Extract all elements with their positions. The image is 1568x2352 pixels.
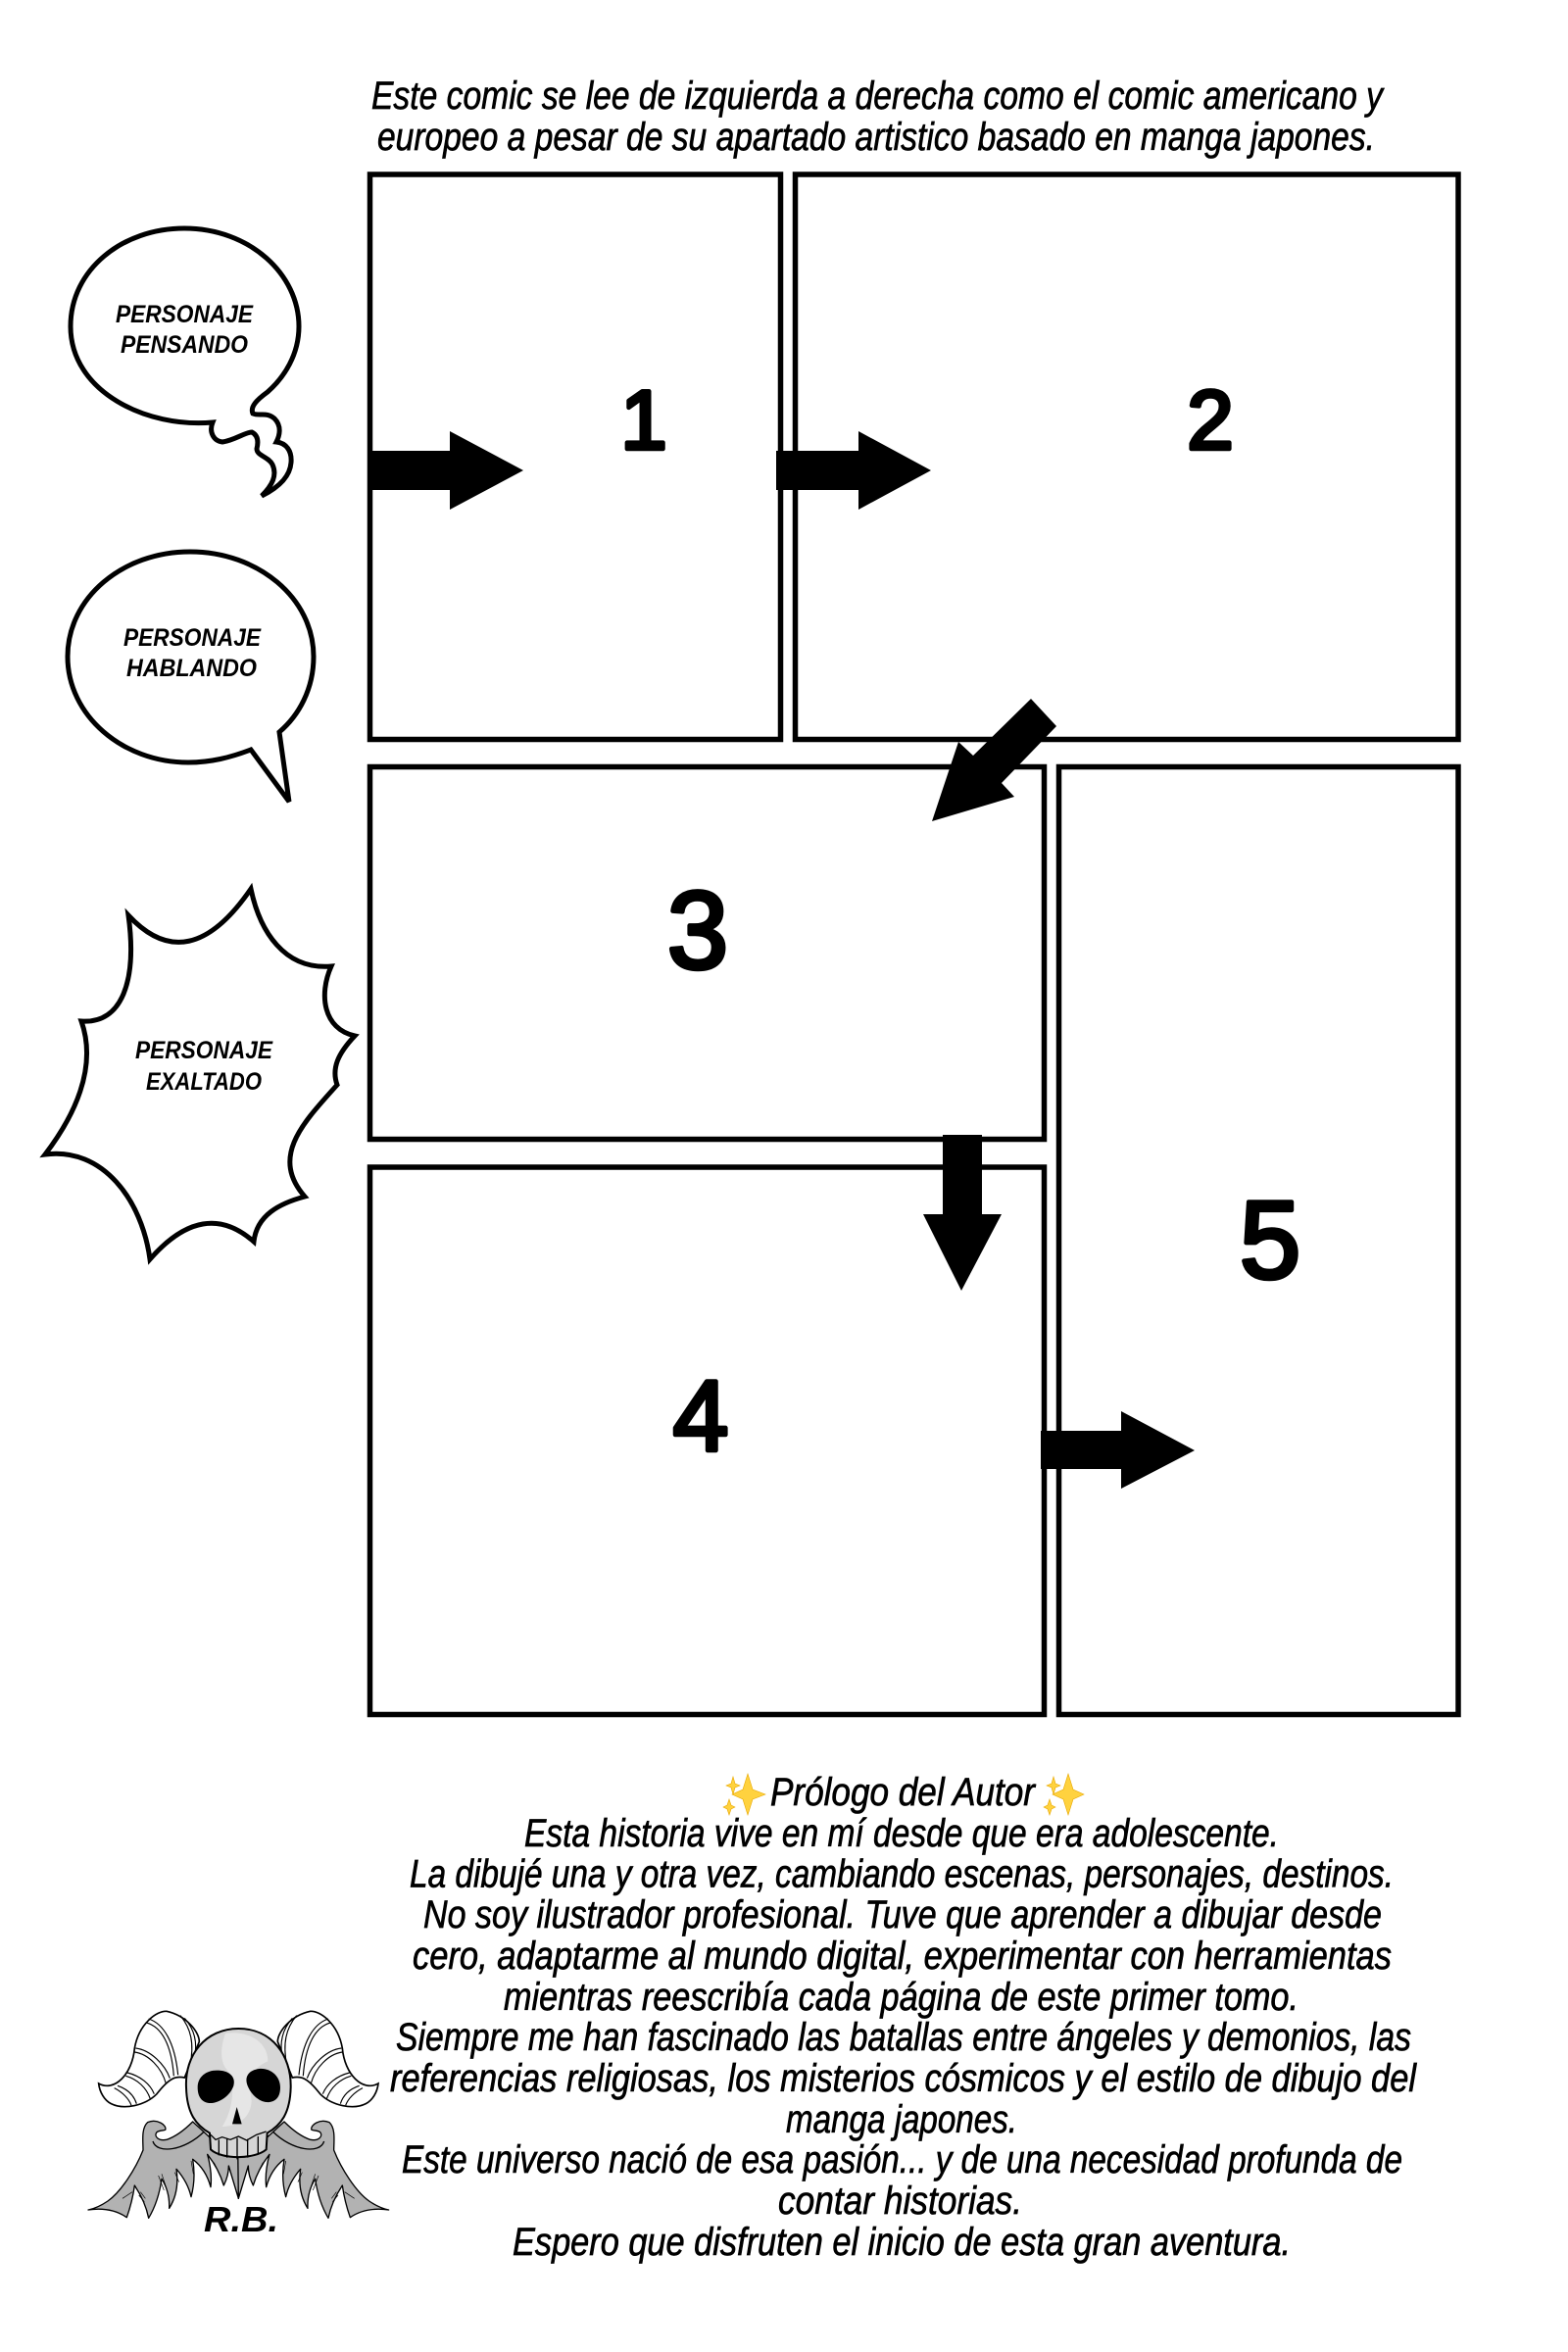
icon: right wing	[238, 2121, 389, 2218]
panel 1	[370, 174, 780, 739]
prologue body text: cero, adaptarme al mundo digital, experimentar con herramientas	[413, 1935, 1392, 1978]
speech bubble: talking	[68, 552, 314, 802]
prologue body text	[390, 1812, 1417, 2264]
prologue body text: manga japones.	[786, 2098, 1017, 2141]
panel 2	[796, 174, 1458, 739]
icon: skull	[186, 2029, 291, 2159]
arrow: panel 2 to panel 3	[932, 699, 1056, 821]
author prologue	[390, 1771, 1417, 2264]
speech bubble: exalted burst	[45, 889, 355, 1259]
speech bubble: thinking	[71, 228, 299, 496]
reading instructions text: Este comic se lee de izquierda a derecha como el comic americano y	[371, 74, 1386, 118]
arrow: into panel 1	[368, 431, 523, 510]
author logo: horned winged skull	[88, 2011, 389, 2239]
speech bubble: exalted burst: EXALTADO	[146, 1068, 262, 1096]
icon: right horn	[277, 2011, 378, 2107]
panel 5	[1058, 766, 1458, 1715]
panel 1: 1	[620, 374, 667, 467]
author logo: horned winged skull: R.B.	[204, 2199, 278, 2239]
icon: left wing	[88, 2121, 239, 2218]
prologue body text: Siempre me han fascinado las batallas entre ángeles y demonios, las	[396, 2016, 1411, 2059]
speech bubble: talking: PERSONAJE	[123, 624, 262, 652]
panel 4	[370, 1167, 1045, 1715]
prologue body text: La dibujé una y otra vez, cambiando escenas, personajes, destinos.	[410, 1852, 1394, 1895]
speech bubble: exalted burst: PERSONAJE	[135, 1037, 273, 1064]
reading instructions text	[371, 74, 1386, 159]
prologue body text: Espero que disfruten el inicio de esta gran aventura.	[513, 2221, 1291, 2264]
prologue heading: Prólogo del Autor	[770, 1771, 1036, 1814]
arrow: panel 1 to panel 2	[776, 431, 931, 510]
prologue body text: referencias religiosas, los misterios cósmicos y el estilo de dibujo del	[390, 2057, 1417, 2100]
panel 3: 3	[667, 869, 728, 992]
prologue body text: contar historias.	[778, 2180, 1022, 2223]
speech bubble: thinking: PENSANDO	[121, 331, 249, 359]
speech bubble: talking: HABLANDO	[126, 655, 258, 682]
panel 4: 4	[673, 1360, 728, 1472]
arrow: panel 4 to panel 5	[1041, 1411, 1195, 1489]
prologue body text: Esta historia vive en mí desde que era adolescente.	[524, 1812, 1279, 1855]
speech bubble: thinking: PERSONAJE	[116, 301, 254, 328]
panel 2: 2	[1187, 374, 1234, 467]
prologue body text: No soy ilustrador profesional. Tuve que aprender a dibujar desde	[423, 1893, 1382, 1936]
panel 3	[370, 766, 1045, 1139]
panel 5: 5	[1240, 1179, 1300, 1301]
reading instructions text: europeo a pesar de su apartado artistico basado en manga japones.	[377, 116, 1375, 159]
icon: left horn	[99, 2011, 199, 2107]
prologue body text: Este universo nació de esa pasión... y de una necesidad profunda de	[402, 2138, 1402, 2181]
arrow: panel 3 to panel 4	[923, 1135, 1002, 1291]
prologue body text: mientras reescribía cada página de este primer tomo.	[504, 1976, 1298, 2019]
